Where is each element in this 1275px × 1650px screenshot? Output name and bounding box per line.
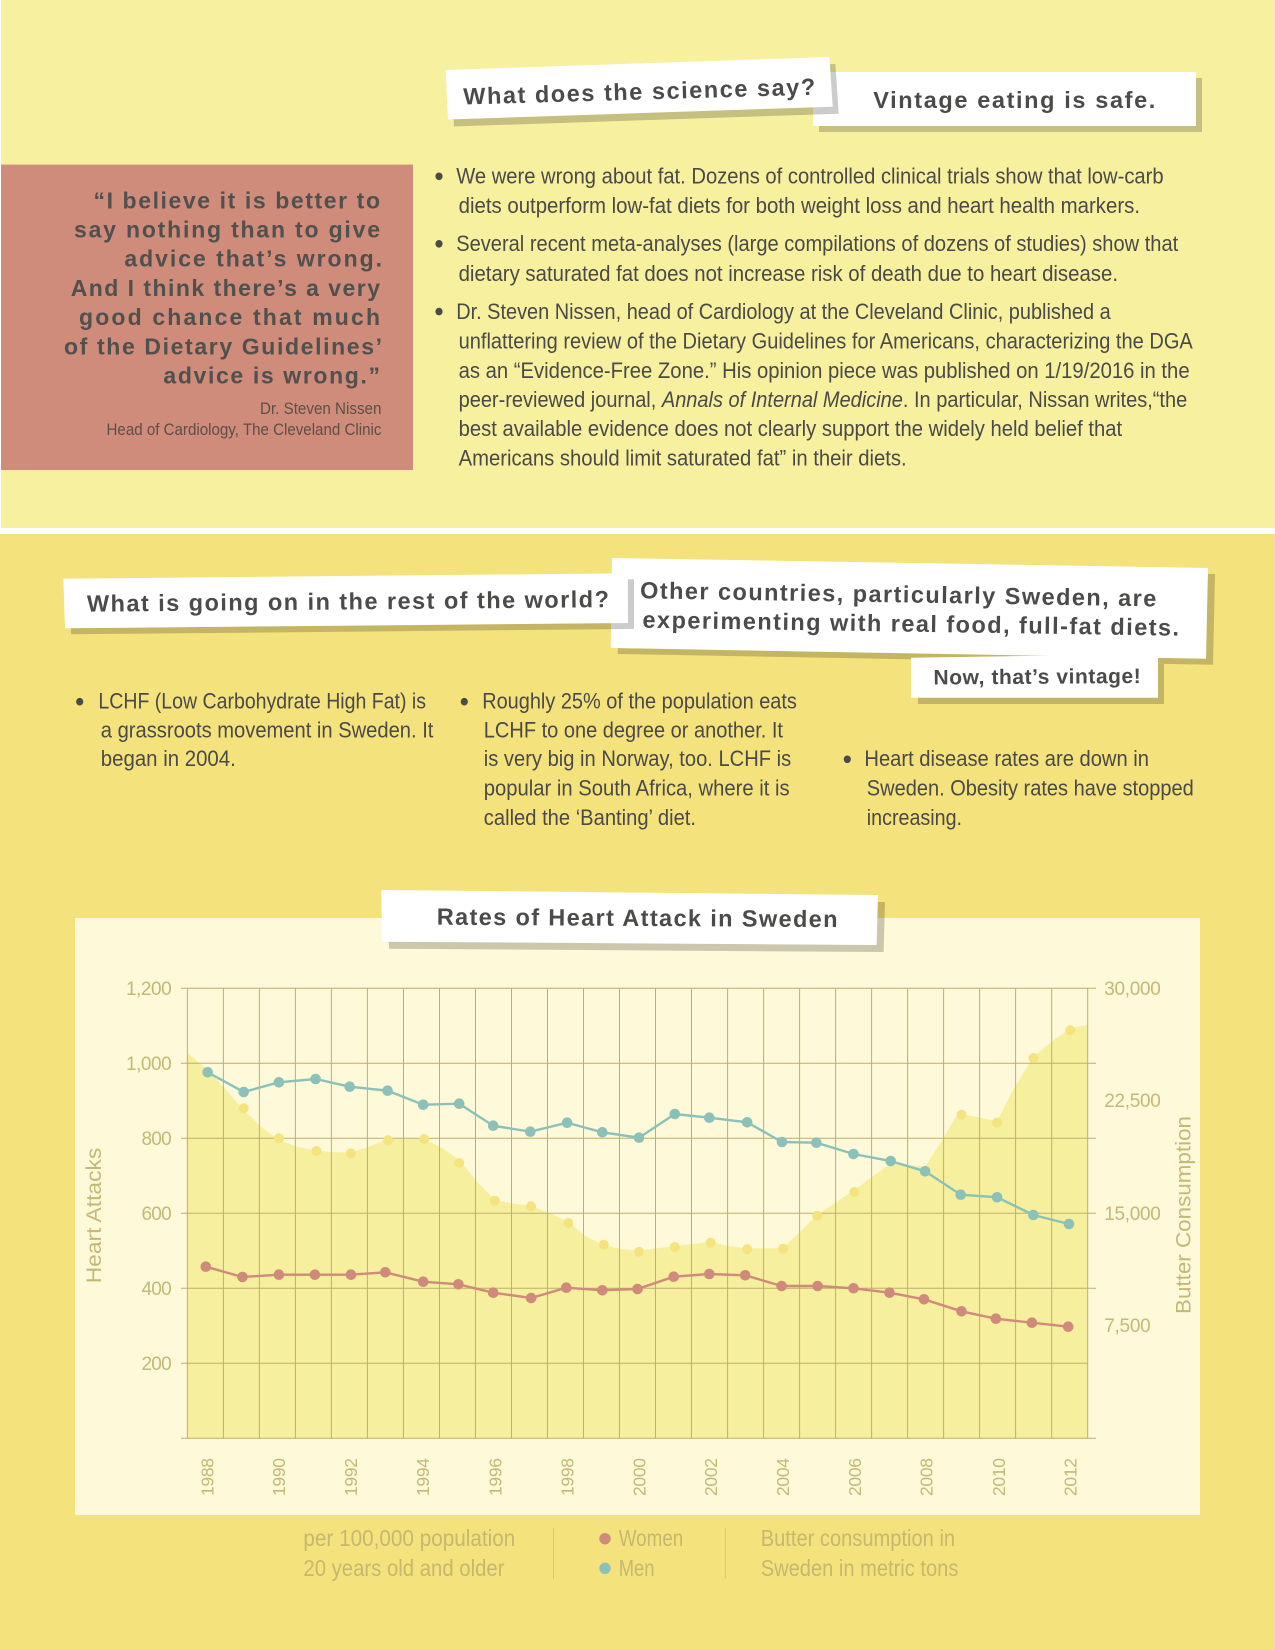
year labels: 2008 <box>917 1458 937 1496</box>
text block: population bullet <box>461 688 797 830</box>
right axis labels: 22,500 <box>1104 1091 1161 1112</box>
heading: what does the science say: What does the science say? <box>463 74 816 109</box>
heading: rates of heart attack in Sweden <box>381 890 885 952</box>
text block: science bullets: We were wrong about fat. Dozens of controlled clinical trials show that low-carb <box>456 164 1164 188</box>
legend: women and men key: Men <box>619 1555 654 1581</box>
text block: science bullets: unflattering review of the Dietary Guidelines for Americans, characterizing the DGA <box>459 328 1193 354</box>
year labels: 1992 <box>341 1458 361 1496</box>
heading: rates of heart attack in Sweden: Rates of Heart Attack in Sweden <box>437 904 838 932</box>
quote text: And I think there’s a very <box>71 275 380 301</box>
text block: science bullets: as an “Evidence-Free Zone.” His opinion piece was published on 1/19/2016 in the <box>459 358 1190 383</box>
year labels: 1990 <box>269 1458 289 1496</box>
butter consumption dots <box>203 1025 1075 1257</box>
right axis labels: 30,000 <box>1104 979 1161 1000</box>
chart: rates of heart attack in Sweden <box>75 918 1200 1515</box>
right axis labels: 7,500 <box>1104 1316 1151 1337</box>
heading: other countries: experimenting with real food, full-fat diets. <box>642 607 1179 641</box>
year labels: 1988 <box>197 1458 217 1496</box>
text block: population bullet: is very big in Norway, too. LCHF is <box>484 746 791 771</box>
text block: science bullets: Americans should limit saturated fat” in their diets. <box>459 446 907 471</box>
year labels: 1994 <box>413 1458 433 1496</box>
quote text: “I believe it is better to <box>94 187 380 213</box>
text block: science bullets: dietary saturated fat does not increase risk of death due to heart disease. <box>459 261 1118 286</box>
left axis labels: 1,000 <box>126 1054 172 1075</box>
text block: science bullets: Several recent meta-analyses (large compilations of dozens of studies) show that <box>456 231 1179 256</box>
heading: now that's vintage <box>911 654 1164 704</box>
left axis labels: 1,200 <box>126 979 172 1000</box>
text block: science bullets <box>435 164 1193 471</box>
legend: women and men key: Women <box>619 1525 683 1551</box>
year labels <box>197 1458 1080 1496</box>
year labels: 1996 <box>485 1458 505 1496</box>
year labels: 1998 <box>557 1458 577 1496</box>
year labels: 2002 <box>701 1458 721 1496</box>
quote text: advice is wrong.” <box>163 363 380 389</box>
left axis labels <box>126 979 172 1375</box>
text block: science bullets: diets outperform low-fat diets for both weight loss and heart health markers. <box>459 193 1140 218</box>
year labels: 2006 <box>845 1458 865 1496</box>
quote attribution <box>106 400 381 439</box>
quote text: of the Dietary Guidelines’ <box>64 334 382 360</box>
quote text: good chance that much <box>79 304 380 330</box>
left axis labels: 400 <box>142 1279 172 1300</box>
year labels: 2000 <box>629 1458 649 1496</box>
text block: LCHF bullet: began in 2004. <box>101 746 236 771</box>
line: women <box>200 1261 1073 1332</box>
right axis labels: 15,000 <box>1104 1204 1161 1225</box>
text block: science bullets: Dr. Steven Nissen, head of Cardiology at the Cleveland Clinic, published a <box>456 299 1111 324</box>
quote text <box>64 187 382 389</box>
heading: what is going on in the rest of the world <box>63 573 634 634</box>
left axis labels: 200 <box>142 1354 172 1375</box>
legend: population note <box>303 1525 515 1581</box>
year labels: 2004 <box>773 1458 793 1496</box>
heading: now that's vintage: Now, that’s vintage! <box>933 665 1141 689</box>
legend: butter consumption note: Sweden in metric tons <box>761 1555 958 1581</box>
text block: science bullets: peer-reviewed journal, Annals of Internal Medicine. In particular, Nissan writes,“the <box>459 387 1187 412</box>
year labels: 2012 <box>1060 1458 1080 1496</box>
quote text: advice that’s wrong. <box>124 246 382 272</box>
panel: rest of world section background <box>0 534 1275 1650</box>
heading: other countries: Other countries, particularly Sweden, are <box>640 577 1157 611</box>
quote attribution: Head of Cardiology, The Cleveland Clinic <box>106 421 381 439</box>
line: men <box>202 1067 1074 1229</box>
text block: heart disease bullet: Sweden. Obesity rates have stopped <box>867 776 1194 801</box>
year labels: 2010 <box>989 1458 1009 1496</box>
text block: science bullets: best available evidence does not clearly support the widely held belief that <box>459 416 1123 441</box>
text block: LCHF bullet: a grassroots movement in Sweden. It <box>101 717 434 742</box>
quote attribution: Dr. Steven Nissen <box>260 400 381 418</box>
text block: population bullet: LCHF to one degree or another. It <box>484 717 784 742</box>
text block: population bullet: Roughly 25% of the population eats <box>482 688 797 713</box>
panel: science section background <box>1 0 1275 528</box>
text block: heart disease bullet <box>844 746 1194 830</box>
legend: population note: per 100,000 population <box>303 1525 515 1551</box>
text block: population bullet: popular in South Africa, where it is <box>484 776 790 801</box>
heading: vintage eating is safe: Vintage eating is safe. <box>873 87 1155 113</box>
text block: population bullet: called the ‘Banting’ diet. <box>484 805 696 830</box>
text block: LCHF bullet: LCHF (Low Carbohydrate High Fat) is <box>98 688 426 713</box>
heading: what is going on in the rest of the world: What is going on in the rest of the world? <box>87 586 609 617</box>
left axis labels: 600 <box>142 1204 172 1225</box>
text block: heart disease bullet: increasing. <box>867 805 962 830</box>
grid lines <box>181 988 1096 1438</box>
left axis title: Heart Attacks <box>82 1148 106 1283</box>
chart panel <box>75 918 1200 1515</box>
legend: population note: 20 years old and older <box>303 1555 505 1581</box>
panel: pull quote <box>1 165 413 470</box>
left axis labels: 800 <box>142 1129 172 1150</box>
area: butter consumption <box>187 1025 1088 1438</box>
text block: heart disease bullet: Heart disease rates are down in <box>864 746 1149 771</box>
text block: LCHF bullet <box>76 688 434 771</box>
legend: butter consumption note: Butter consumption in <box>761 1525 955 1551</box>
quote text: say nothing than to give <box>74 216 380 242</box>
heading: other countries <box>611 558 1215 665</box>
heading: vintage eating is safe <box>813 72 1202 132</box>
right axis title: Butter Consumption <box>1172 1116 1196 1314</box>
legend: butter consumption note <box>761 1525 958 1581</box>
right axis labels <box>1104 979 1161 1337</box>
heading: what does the science say <box>446 57 839 126</box>
legend: women and men key <box>554 1525 725 1581</box>
